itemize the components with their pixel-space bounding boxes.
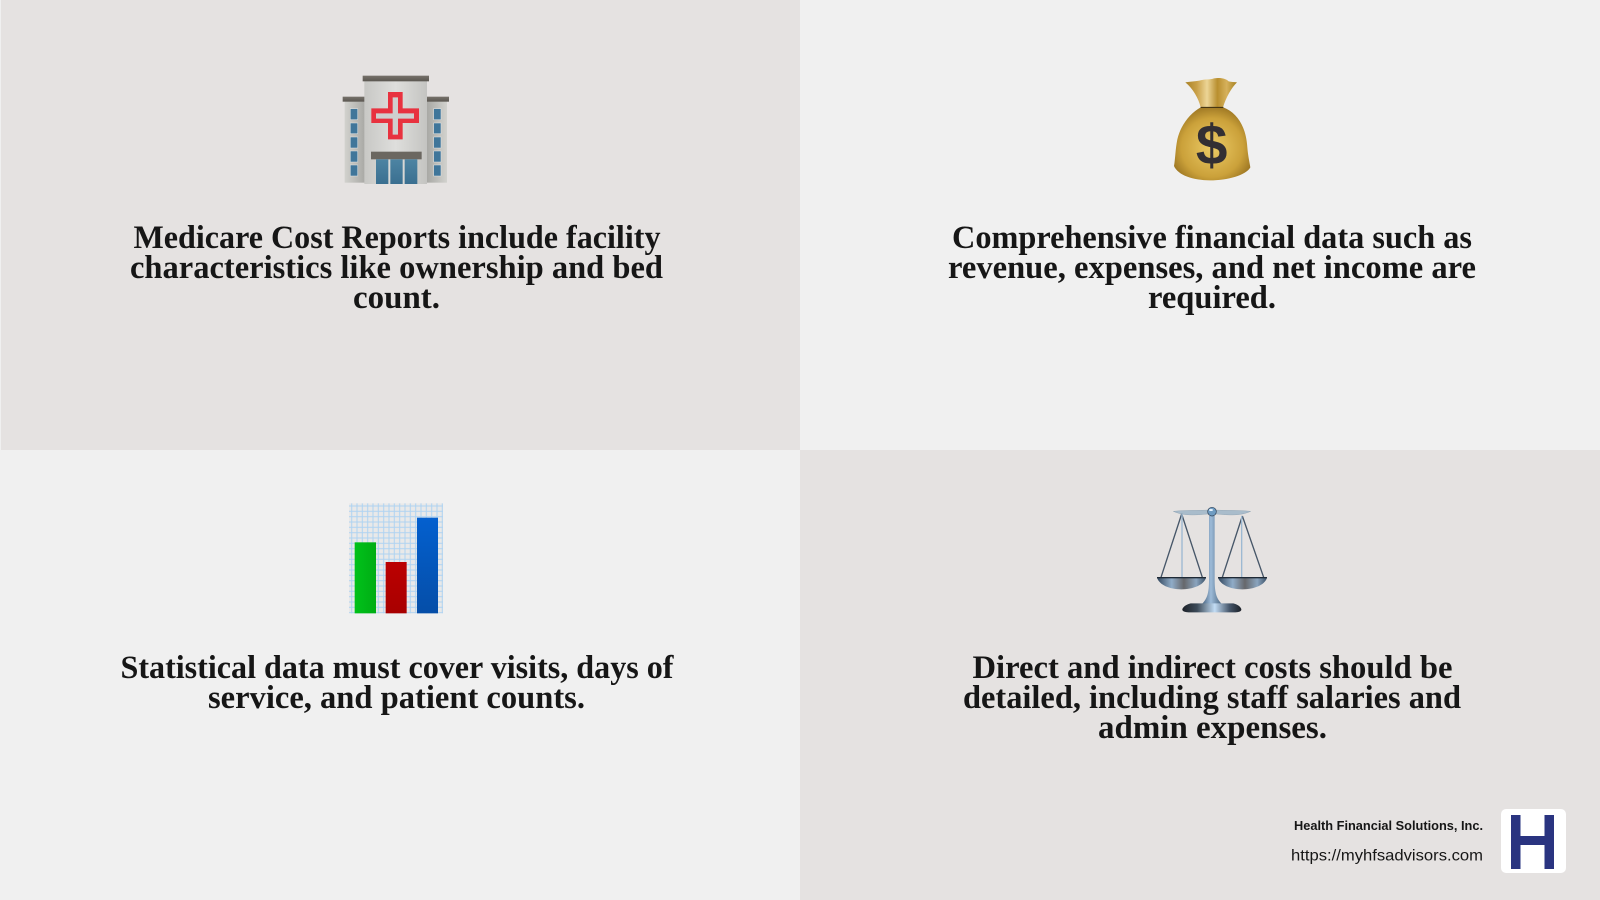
heading: facility characteristics: Medicare Cost Reports include facility (134, 220, 661, 256)
heading: statistical data: service, and patient counts. (208, 680, 585, 716)
heading: facility characteristics: characteristics like ownership and bed (130, 250, 663, 286)
footer: company name and website: https://myhfsadvisors.com (1291, 848, 1483, 864)
heading: financial data: required. (1148, 280, 1276, 316)
panel: statistical data (0, 450, 800, 900)
heading: direct and indirect costs: detailed, including staff salaries and (963, 680, 1461, 716)
heading: direct and indirect costs (963, 650, 1461, 746)
panel: direct and indirect costs (800, 450, 1600, 900)
heading: statistical data (120, 650, 674, 716)
heading: financial data (948, 220, 1476, 316)
heading: direct and indirect costs: Direct and indirect costs should be (972, 650, 1452, 686)
logo: Health Financial Solutions (1501, 809, 1566, 873)
icon text: dollar sign: $ (1196, 115, 1227, 178)
heading: direct and indirect costs: admin expenses. (1098, 710, 1327, 746)
footer: company name and website: Health Financial Solutions, Inc. (1294, 818, 1483, 833)
heading: facility characteristics: count. (353, 280, 440, 316)
heading: financial data: revenue, expenses, and net income are (948, 250, 1476, 286)
icon: bar chart (349, 503, 443, 613)
panel: financial data (800, 0, 1600, 450)
icon: balance scale (1157, 507, 1267, 612)
heading: statistical data: Statistical data must cover visits, days of (120, 650, 674, 686)
footer: company name and website (1291, 818, 1483, 864)
panel: facility characteristics (0, 0, 800, 450)
icon: money bag (1174, 78, 1250, 180)
icon: hospital building (343, 76, 449, 184)
heading: facility characteristics (130, 220, 663, 316)
heading: financial data: Comprehensive financial data such as (952, 220, 1472, 256)
